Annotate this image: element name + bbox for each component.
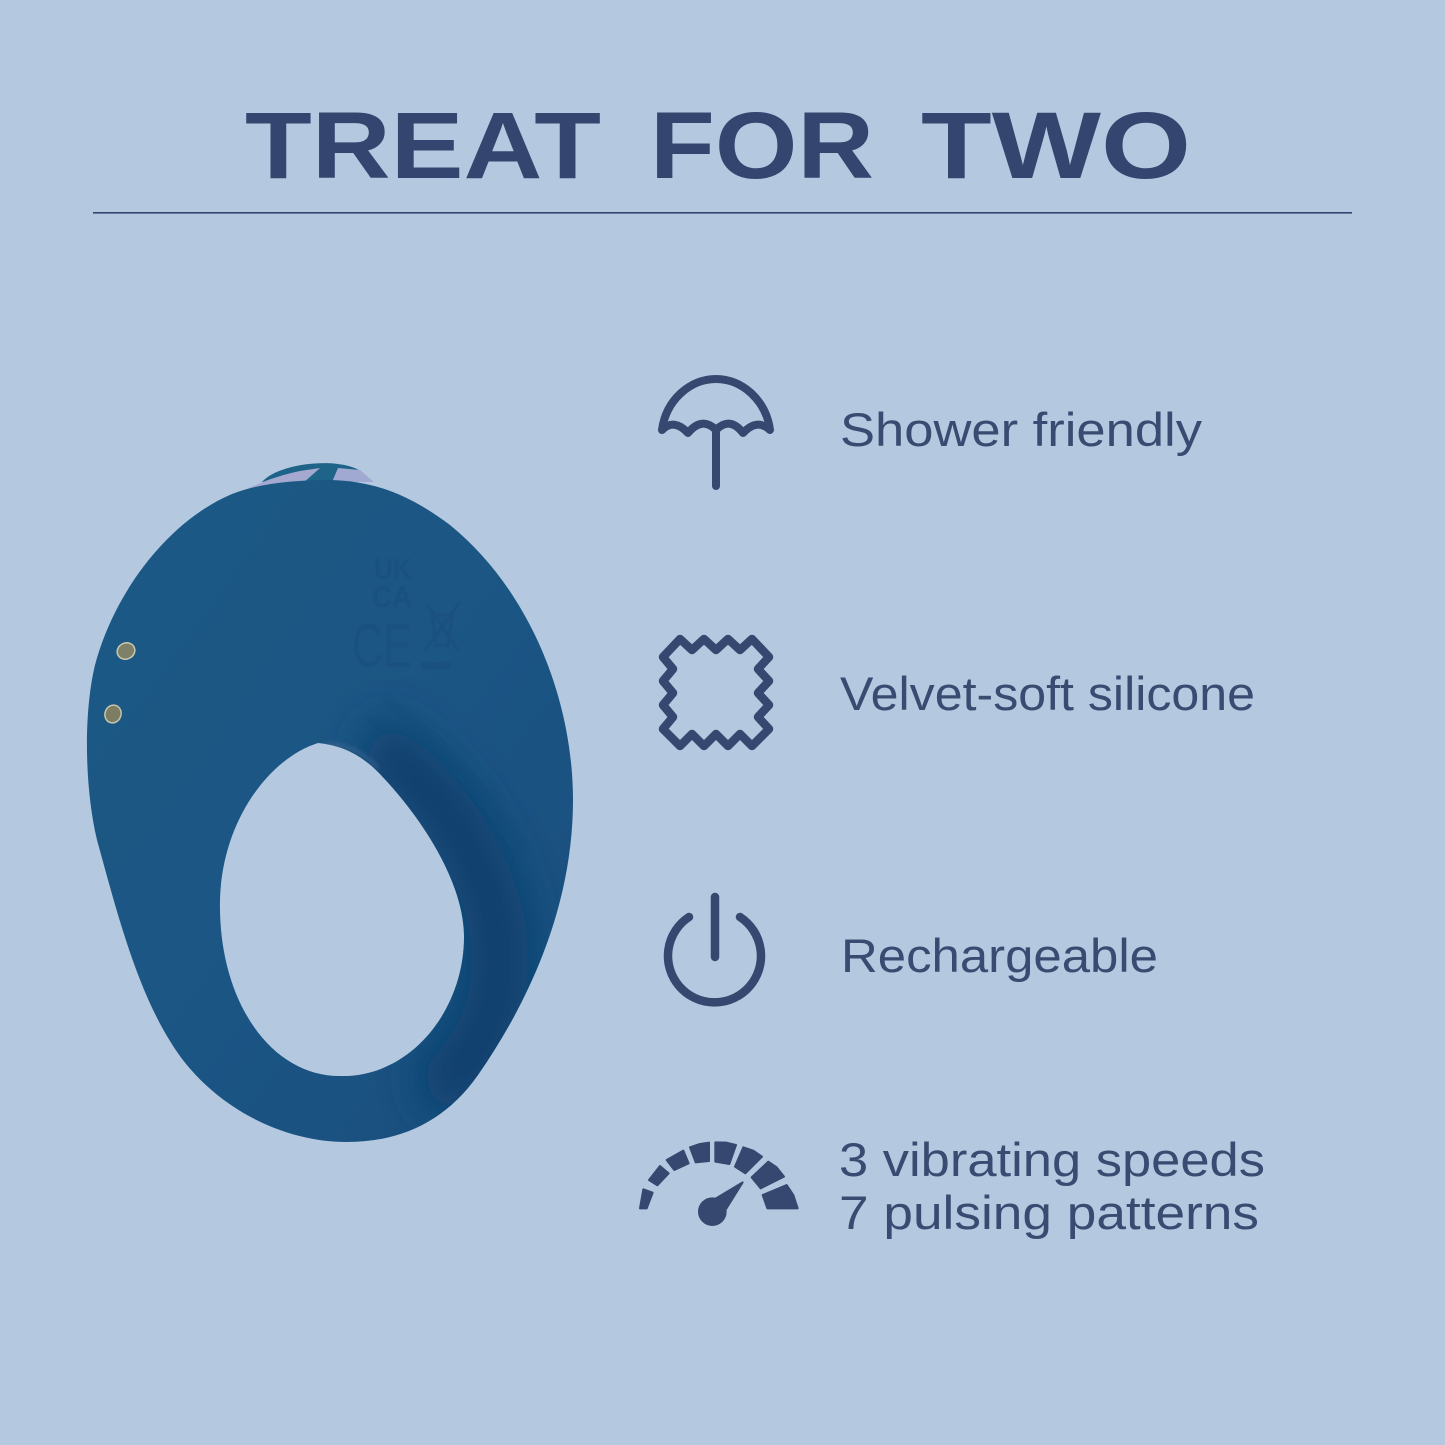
icon: fabric swatch xyxy=(663,639,769,746)
ring shading xyxy=(325,700,525,1095)
top button cap xyxy=(234,463,374,497)
title: TWO xyxy=(921,93,1191,199)
title xyxy=(245,93,1191,199)
product: silicone ring xyxy=(87,463,573,1142)
icon: umbrella xyxy=(662,379,770,486)
embossed certification marks: UK xyxy=(374,553,412,586)
text: speeds and patterns xyxy=(839,1133,1265,1239)
text: speeds and patterns: 7 pulsing patterns xyxy=(839,1186,1259,1239)
embossed certification marks: CA xyxy=(372,581,412,614)
embossed certification marks xyxy=(352,553,460,681)
ring body xyxy=(87,480,573,1142)
icon: speedometer xyxy=(640,1142,798,1225)
feature: velvet-soft silicone xyxy=(663,639,1255,746)
title: FOR xyxy=(650,93,874,199)
text: speeds and patterns: 3 vibrating speeds xyxy=(839,1133,1265,1186)
feature: rechargeable xyxy=(668,897,1158,1002)
feature: rechargeable: Rechargeable xyxy=(841,929,1158,982)
feature: speeds and patterns xyxy=(640,1133,1265,1239)
feature: shower friendly xyxy=(662,379,1203,486)
embossed certification marks: CE xyxy=(352,612,412,681)
charging contacts xyxy=(102,640,138,725)
feature: velvet-soft silicone: Velvet-soft silicone xyxy=(840,667,1255,720)
title: TREAT xyxy=(245,93,601,199)
icon: power button xyxy=(668,897,761,1002)
feature: shower friendly: Shower friendly xyxy=(840,403,1203,456)
